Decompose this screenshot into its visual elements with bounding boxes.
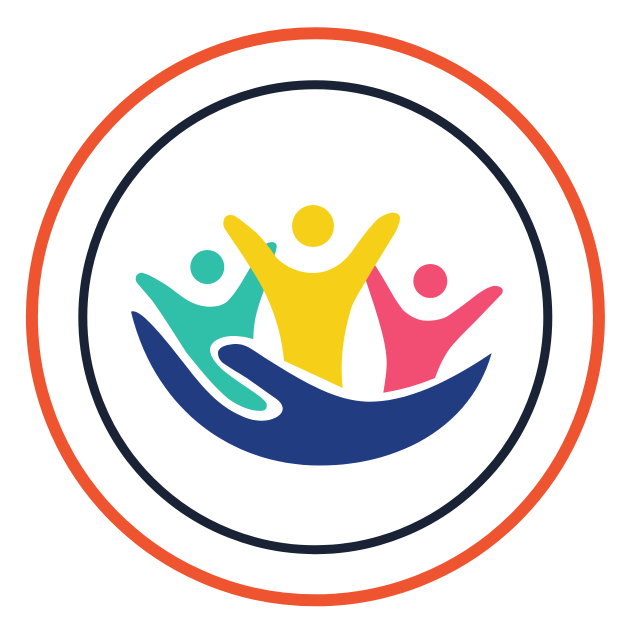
- icon: blue helping hand: [131, 311, 492, 466]
- icon: teal person: [136, 242, 277, 411]
- icon: yellow person: [223, 205, 400, 388]
- icon: pink person: [362, 262, 503, 393]
- inner navy ring: [83, 85, 548, 550]
